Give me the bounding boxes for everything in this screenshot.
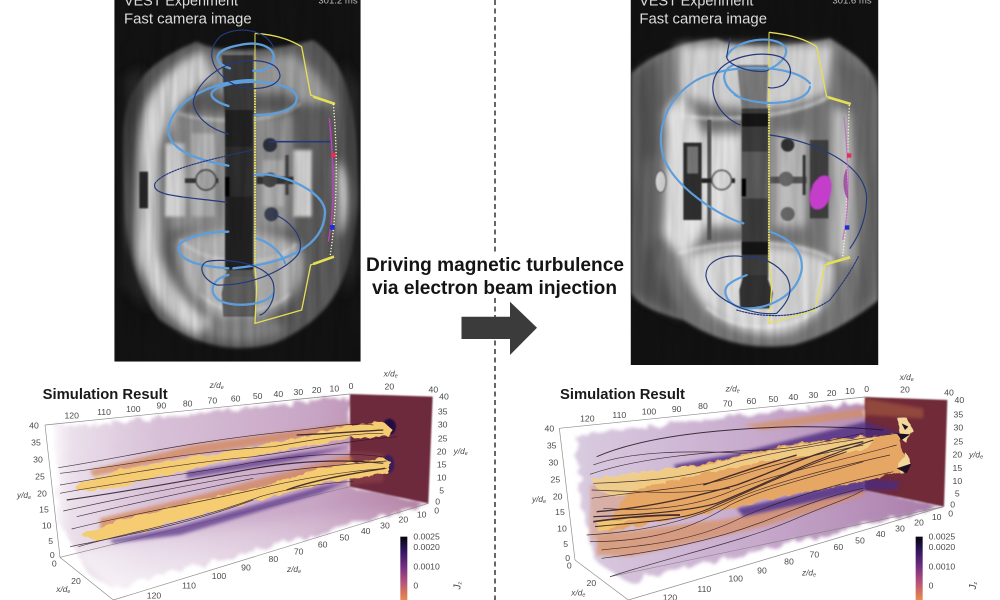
axis tick labels: 5 xyxy=(955,489,960,499)
central current sheet xyxy=(607,433,912,532)
axis tick labels: 30 xyxy=(33,455,43,465)
axis tick labels: 50 xyxy=(769,394,778,404)
volume haze xyxy=(575,402,943,582)
axis tick labels: 10 xyxy=(330,384,339,394)
colour bar: 0.0010 xyxy=(413,562,440,572)
axis tick labels: 120 xyxy=(64,411,79,421)
first wall outline in yellow xyxy=(255,33,336,323)
axis tick labels: y/de xyxy=(968,449,983,461)
orange halo bands xyxy=(590,408,865,557)
headline: Driving magnetic turbulence via electron beam injection: via electron beam injection xyxy=(372,277,617,299)
magenta diagnostic line with markers xyxy=(843,117,851,240)
axis tick labels: 35 xyxy=(954,409,963,419)
axis tick labels: 0 xyxy=(434,505,439,515)
axis tick labels: z/de xyxy=(209,380,224,391)
3D box axes xyxy=(559,397,943,600)
axis tick labels: z/de xyxy=(801,567,816,579)
colour bar: 0.0025 xyxy=(413,532,440,542)
axis tick labels: 40 xyxy=(944,387,954,397)
axis tick labels: 80 xyxy=(183,398,193,408)
axis tick labels: 15 xyxy=(39,504,49,514)
axis tick labels: 20 xyxy=(553,491,563,501)
axis tick labels: 30 xyxy=(895,523,905,533)
pale tips in cross-section xyxy=(897,418,913,473)
panel: right fast camera image xyxy=(631,0,878,365)
dashed centre divider xyxy=(494,0,496,600)
axis tick labels: 70 xyxy=(810,549,819,559)
axis tick labels: x/de xyxy=(55,584,70,595)
axis tick labels: 110 xyxy=(97,407,111,417)
orange halo around tubes xyxy=(90,423,353,530)
dark blue magnetic field lines xyxy=(706,38,867,316)
axis tick labels: 30 xyxy=(294,387,303,397)
axis tick labels: 100 xyxy=(642,407,656,417)
axis tick labels: 80 xyxy=(698,401,708,411)
axis tick labels: 0 xyxy=(950,499,955,509)
axis tick labels: 20 xyxy=(914,518,924,528)
axis tick labels: 50 xyxy=(855,536,865,546)
heading: Simulation Result: Simulation Result xyxy=(43,387,168,403)
axis tick labels: 100 xyxy=(212,571,226,581)
axis tick labels xyxy=(531,372,983,600)
axis tick labels: 20 xyxy=(312,385,322,395)
concentric port rings xyxy=(678,97,833,327)
axis tick labels: 0 xyxy=(349,381,354,391)
axis tick labels: 10 xyxy=(845,386,855,396)
colour bar xyxy=(916,531,979,600)
axis tick labels: 40 xyxy=(274,389,283,399)
heading: Simulation Result: Simulation Result xyxy=(560,387,685,403)
axis tick labels: 35 xyxy=(438,406,448,416)
axis tick labels: y/de xyxy=(531,494,546,505)
axis tick labels: 5 xyxy=(48,536,53,546)
axis tick labels: 30 xyxy=(438,420,448,430)
axis tick labels: 110 xyxy=(697,584,711,594)
axis tick labels: 90 xyxy=(241,562,251,572)
axis tick labels: 40 xyxy=(545,423,554,433)
colour bar: 0.0020 xyxy=(413,542,440,552)
axis tick labels: 10 xyxy=(42,521,52,531)
panel: left simulation result xyxy=(16,369,468,600)
axis tick labels: 30 xyxy=(549,458,558,468)
arrow pointing right xyxy=(462,302,537,355)
axis tick labels: 60 xyxy=(318,539,328,549)
axis tick labels: 20 xyxy=(587,578,596,588)
panel: left fast camera image xyxy=(114,0,361,362)
axis tick labels: 10 xyxy=(417,509,427,519)
axis tick labels: z/de xyxy=(286,564,301,575)
axis tick labels: 30 xyxy=(380,521,390,531)
axis tick labels: 70 xyxy=(208,396,217,406)
axis tick labels: y/de xyxy=(16,490,31,501)
light blue magnetic field lines xyxy=(168,44,325,305)
Fast camera image label: Fast camera image xyxy=(124,10,252,27)
camera photo: vessel interior xyxy=(121,38,361,350)
axis tick labels: 15 xyxy=(953,463,962,473)
axis tick labels: 40 xyxy=(789,392,798,402)
upper current tube xyxy=(75,422,393,491)
axis tick labels: 10 xyxy=(557,524,567,534)
axis tick labels: 50 xyxy=(253,391,263,401)
camera photo: vessel interior xyxy=(630,36,878,348)
axis tick labels: 70 xyxy=(294,547,304,557)
axis tick labels: x/de xyxy=(899,372,914,383)
colour bar: Jz xyxy=(453,582,464,591)
axis tick labels: 20 xyxy=(953,450,962,460)
axis tick labels: 5 xyxy=(439,486,444,496)
headline: Driving magnetic turbulence via electron beam injection: Driving magnetic turbulence xyxy=(366,254,624,276)
axis tick labels: 60 xyxy=(834,542,843,552)
axis tick labels: 20 xyxy=(437,447,447,457)
dark purple current swaths xyxy=(673,422,900,517)
axis tick labels: 110 xyxy=(612,410,626,420)
colour bar: 0.0020 xyxy=(929,542,955,552)
axis tick labels: 120 xyxy=(580,413,595,423)
axis tick labels: 5 xyxy=(563,539,568,549)
volume haze xyxy=(55,397,428,588)
axis tick labels: 60 xyxy=(747,396,756,406)
magenta diagnostic line with markers xyxy=(328,118,336,242)
axis tick labels: 90 xyxy=(757,565,767,575)
axis tick labels: 10 xyxy=(932,512,942,522)
axis tick labels: 0 xyxy=(50,550,55,560)
pale upper edge of current sheet xyxy=(592,437,877,497)
concentric port rings xyxy=(178,103,300,311)
colour bar xyxy=(400,532,464,600)
axis tick labels xyxy=(16,369,468,600)
axis tick labels: 25 xyxy=(954,437,963,447)
axis tick labels: 40 xyxy=(429,384,438,394)
axis tick labels: 50 xyxy=(340,532,349,542)
purple current sheets under tubes xyxy=(110,447,350,543)
axis tick labels: 20 xyxy=(827,388,837,398)
axis tick labels: 35 xyxy=(547,440,557,450)
cross-section plane at z=0 xyxy=(865,397,947,507)
axis tick labels: 70 xyxy=(723,398,733,408)
colour bar: 0 xyxy=(413,581,418,591)
axis tick labels: 10 xyxy=(953,476,962,486)
axis tick labels: 40 xyxy=(439,392,449,402)
axis tick labels: 35 xyxy=(31,438,41,448)
axis tick labels: 20 xyxy=(71,576,81,586)
axis tick labels: 30 xyxy=(809,390,818,400)
magenta emission blob xyxy=(809,175,832,209)
colour bar: 0.0010 xyxy=(929,562,955,572)
axis tick labels: 40 xyxy=(876,529,886,539)
light blue magnetic field lines xyxy=(661,40,810,308)
axis tick labels: x/de xyxy=(383,369,398,380)
panel: right simulation result xyxy=(531,372,983,600)
first wall outline in yellow xyxy=(769,32,851,323)
axis tick labels: 90 xyxy=(672,404,682,414)
axis tick labels: 100 xyxy=(728,574,743,584)
cross-section plane at z=0 xyxy=(350,394,433,503)
magnetic field lines xyxy=(587,427,897,577)
axis tick labels: 0 xyxy=(948,508,953,518)
axis tick labels: 0 xyxy=(52,558,57,568)
colour bar: Jz xyxy=(968,582,979,591)
lower current tube xyxy=(81,458,392,541)
colour bar: 0.0025 xyxy=(929,531,955,541)
axis tick labels: 25 xyxy=(35,471,45,481)
axis tick labels: 90 xyxy=(157,401,166,411)
axis tick labels: z/de xyxy=(725,383,740,395)
headline: Driving magnetic turbulence via electron beam injection xyxy=(366,254,624,299)
axis tick labels: 100 xyxy=(126,404,141,414)
axis tick labels: 15 xyxy=(555,507,565,517)
axis tick labels: 110 xyxy=(182,581,196,591)
axis tick labels: 0 xyxy=(565,553,570,563)
axis tick labels: 0 xyxy=(864,384,869,394)
axis tick labels: 0 xyxy=(567,561,572,571)
axis tick labels: x/de xyxy=(570,588,585,599)
axis tick labels: 20 xyxy=(900,385,910,395)
axis tick labels: 25 xyxy=(438,433,448,443)
axis tick labels: y/de xyxy=(453,446,468,457)
axis tick labels: 80 xyxy=(784,557,794,567)
colour bar: 0 xyxy=(929,581,934,591)
axis tick labels: 15 xyxy=(437,460,447,470)
axis tick labels: 20 xyxy=(37,488,47,498)
dark mark in cross-section xyxy=(897,423,912,473)
axis tick labels: 0 xyxy=(435,497,440,507)
Fast camera image label: Fast camera image xyxy=(639,10,767,27)
magnetic field lines xyxy=(58,424,397,547)
axis tick labels: 40 xyxy=(29,421,39,431)
axis tick labels: 25 xyxy=(551,474,560,484)
dark blue magnetic field lines xyxy=(155,30,330,315)
axis tick labels: 20 xyxy=(399,515,408,525)
axis tick labels: 10 xyxy=(437,473,447,483)
3D box axes xyxy=(45,394,428,600)
axis tick labels: 40 xyxy=(955,395,964,405)
axis tick labels: 40 xyxy=(361,526,371,536)
axis tick labels: 20 xyxy=(385,381,394,391)
axis tick labels: 80 xyxy=(269,554,278,564)
axis tick labels: 60 xyxy=(231,393,241,403)
axis tick labels: 30 xyxy=(954,423,963,433)
